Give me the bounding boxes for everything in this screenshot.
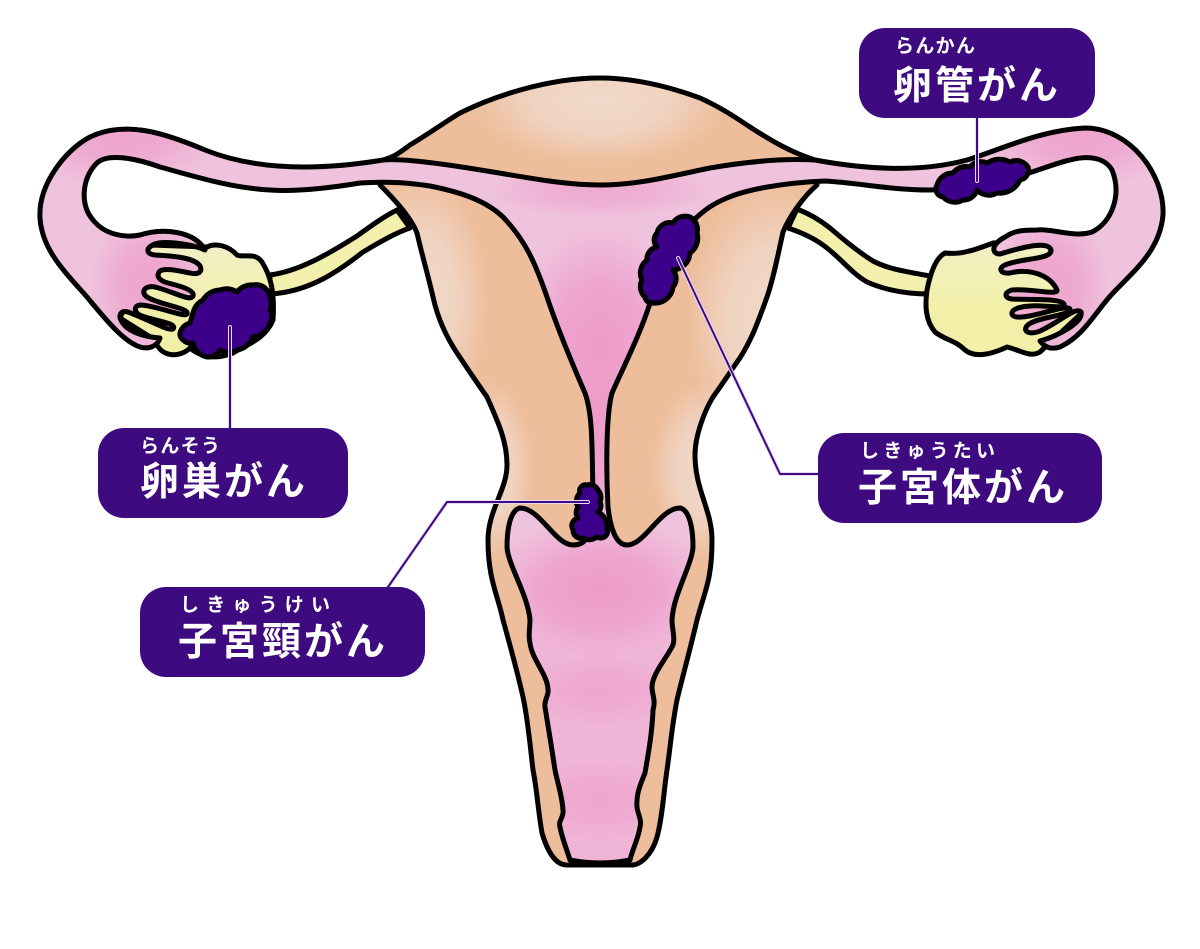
uterus body: [378, 76, 820, 868]
label: fallopian tube cancer: 卵管がん: [893, 65, 1058, 108]
label: ovarian cancer: らんそう: [140, 436, 220, 457]
right ovary: [926, 240, 1085, 355]
label: cervical cancer: しきゅうけい: [180, 594, 330, 616]
label: fallopian tube cancer: らんかん: [895, 36, 975, 57]
label: uterine body cancer: 子宮体がん: [858, 467, 1065, 510]
label: uterine body cancer: しきゅうたい: [860, 440, 995, 462]
tumor: ovary: [180, 285, 272, 357]
label: uterine body cancer: [818, 433, 1102, 523]
label: cervical cancer: 子宮頸がん: [178, 621, 385, 664]
tumor: fallopian tube: [936, 159, 1028, 202]
connector: fallopian tube: [975, 118, 979, 181]
label: cervical cancer: [140, 587, 425, 677]
label: ovarian cancer: [98, 428, 348, 518]
connector: cervix: [388, 502, 588, 587]
label: fallopian tube cancer: [859, 28, 1095, 118]
ligament: left ovarian: [270, 210, 410, 294]
ligament: right ovarian: [788, 209, 930, 294]
tumor: uterine body: [640, 216, 698, 303]
left ovary: [120, 245, 273, 357]
connector: ovary: [228, 327, 232, 428]
connector: uterine body: [678, 258, 818, 474]
label: ovarian cancer: 卵巣がん: [140, 461, 305, 504]
uterine cavity, fallopian tubes and vaginal canal: [37, 126, 1166, 862]
tumor: cervix: [572, 485, 608, 540]
